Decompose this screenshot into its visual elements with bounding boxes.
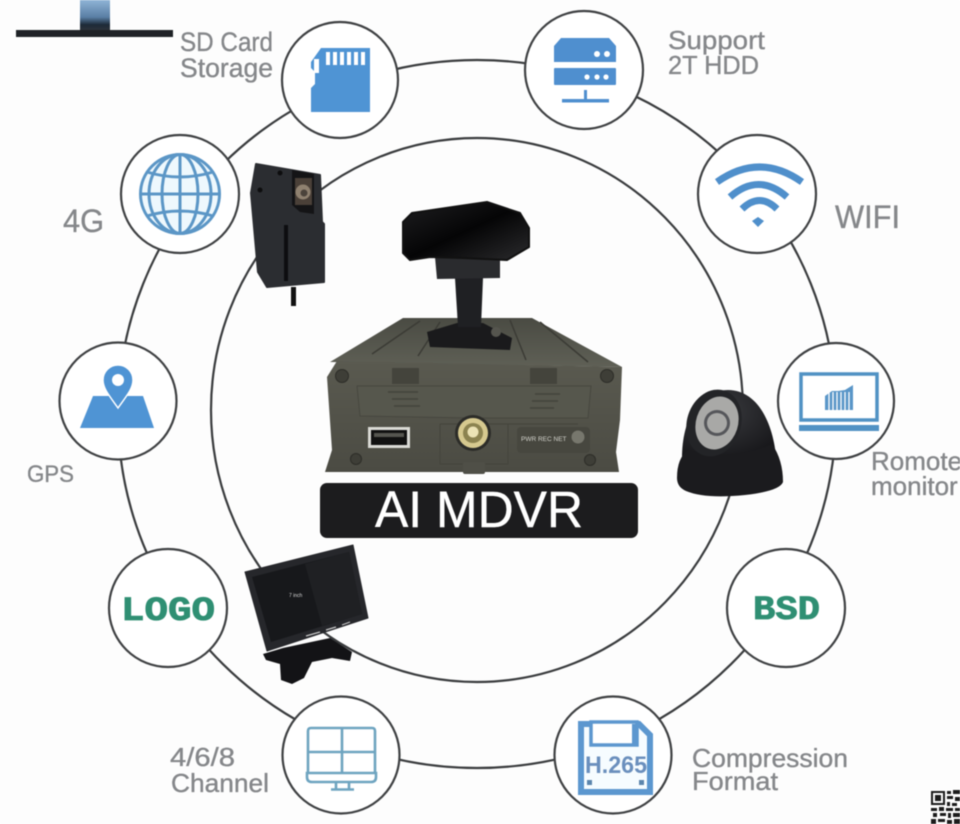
monitor stand: [263, 638, 352, 684]
label: Compression Format: Format: [692, 766, 779, 796]
product: AI MDVR recorder: [325, 318, 622, 474]
label: SD Card Storage: SD Card: [180, 27, 273, 57]
feature: 4G: [63, 135, 239, 253]
product: dome camera: [677, 382, 783, 496]
QR code fragment: [931, 790, 960, 824]
label: Compression Format: Compression: [692, 743, 848, 773]
status panel: [517, 427, 590, 453]
icon: floppy disk H.265: H.265: [585, 752, 647, 779]
USB port: [368, 427, 410, 448]
status panel: PWR REC NET: [521, 436, 567, 443]
label: GPS: GPS: [27, 461, 74, 488]
feature: LOGO: [109, 549, 227, 667]
feature: H.265 compression format: [554, 696, 848, 814]
label: Romote monitor: monitor: [871, 471, 958, 501]
AI MDVR title bar: [320, 481, 638, 538]
label: 4/6/8 Channel: Channel: [171, 768, 269, 798]
recorder top face: [330, 318, 622, 367]
icon: LOGO lettering: LOGO: [121, 593, 215, 631]
label: Romote monitor: [871, 446, 960, 501]
feature: WIFI: [698, 135, 900, 253]
label: Support 2T HDD: Support: [668, 25, 766, 55]
monitor stand fragment at top left: [16, 0, 173, 37]
label: WIFI: WIFI: [835, 199, 900, 235]
feature: 2T HDD: [525, 11, 766, 129]
icon: split-screen monitor: [307, 728, 376, 790]
BNC connector: [440, 415, 578, 474]
feature: remote monitor: [778, 343, 960, 501]
outer connecting ring: [118, 60, 836, 768]
inner ring: [211, 138, 743, 682]
icon: wifi: [717, 167, 802, 227]
label: 4/6/8 Channel: 4/6/8: [170, 742, 235, 772]
product: 7 inch monitor: [245, 545, 368, 684]
feature: GPS: [27, 342, 176, 488]
icon: map pin: [80, 365, 154, 428]
feature: 4/6/8 channel: [170, 696, 400, 814]
feature: BSD: [727, 549, 845, 667]
icon: floppy disk H.265: [581, 722, 650, 792]
label: Support 2T HDD: [668, 25, 766, 80]
icon: laptop with chart: [799, 374, 879, 431]
AI MDVR title bar: AI MDVR: [375, 481, 583, 538]
label: Support 2T HDD: 2T HDD: [668, 50, 759, 80]
label: Romote monitor: Romote: [871, 446, 960, 476]
icon: globe: [140, 154, 220, 234]
label: SD Card Storage: [180, 27, 273, 83]
product: 7 inch monitor: 7 inch: [289, 593, 303, 599]
product: side camera: [251, 164, 324, 306]
product: AI camera on recorder: [403, 202, 529, 350]
icon: SD card: [311, 48, 370, 112]
icon: server: [554, 38, 616, 102]
icon: BSD lettering: BSD: [753, 592, 820, 630]
label: SD Card Storage: Storage: [180, 53, 273, 83]
label: 4G: 4G: [63, 203, 104, 239]
feature: SD card storage: [180, 22, 398, 138]
recorder front face: [325, 361, 622, 472]
label: Compression Format: [692, 743, 848, 796]
label: 4/6/8 Channel: [170, 742, 269, 798]
